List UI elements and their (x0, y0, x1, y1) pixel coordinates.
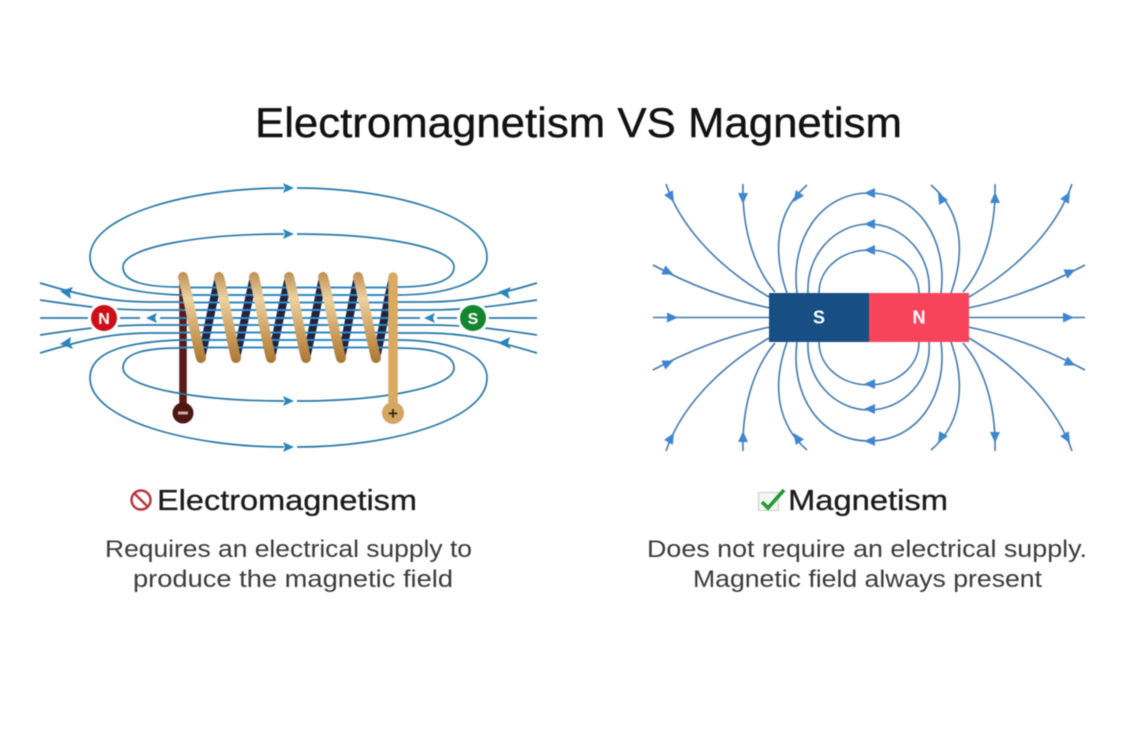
title: Electromagnetism VS Magnetism (255, 99, 902, 146)
field lines through coil (180, 288, 397, 348)
panel: bar magnet diagram (653, 184, 1085, 451)
positive lead: + (388, 404, 398, 423)
heading: magnetism: Magnetism (788, 485, 948, 517)
bar magnet: S (813, 308, 825, 328)
right side field lines (397, 283, 537, 353)
text block: magnetism description (647, 536, 1087, 593)
field arrows (661, 188, 1078, 446)
bar magnet (769, 293, 969, 342)
fan lines upper left (653, 184, 807, 318)
south pole badge (457, 302, 489, 334)
fan lines lower left (653, 327, 807, 451)
coil back strands (201, 277, 393, 358)
south pole badge: S (468, 311, 479, 328)
fan lines upper right (931, 184, 1085, 318)
coil front strands (183, 277, 376, 358)
lower field loops (90, 340, 487, 452)
magnetic field loops (796, 193, 942, 441)
north pole badge (88, 302, 120, 334)
fan lines lower right (931, 327, 1085, 451)
bar magnet: N (912, 308, 926, 328)
text block: electromagnetism description: produce the magnetic field (133, 566, 453, 593)
heading: electromagnetism: Electromagnetism (157, 485, 417, 517)
upper field loops (90, 183, 487, 295)
text block: electromagnetism description: Requires an electrical supply to (105, 536, 472, 563)
text block: magnetism description: Magnetic field always present (693, 566, 1042, 593)
text block: magnetism description: Does not require an electrical supply. (647, 536, 1087, 563)
negative lead (172, 277, 194, 424)
text block: electromagnetism description (105, 536, 472, 593)
icon: green check mark (758, 490, 784, 510)
left side field lines (40, 283, 180, 353)
panel: electromagnet diagram (40, 183, 537, 452)
positive lead (382, 277, 404, 424)
north pole badge: N (98, 311, 110, 328)
icon: prohibited sign (132, 490, 150, 510)
